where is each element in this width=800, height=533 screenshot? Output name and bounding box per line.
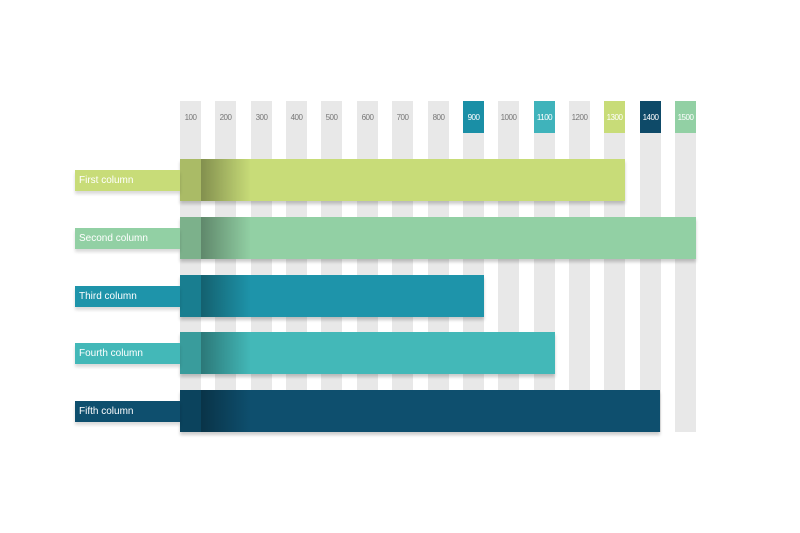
bar: fifth column xyxy=(180,390,660,432)
axis labels xyxy=(185,101,696,133)
axis labels: 500 xyxy=(326,113,337,122)
axis labels: 1100 xyxy=(537,113,552,122)
axis labels: 400 xyxy=(291,113,302,122)
label: second column xyxy=(75,228,180,249)
label: third column: Third column xyxy=(79,291,137,302)
label: first column xyxy=(75,170,180,191)
axis labels: 200 xyxy=(220,113,231,122)
axis labels: 1500 xyxy=(678,113,693,122)
bar: second column xyxy=(180,217,696,259)
axis labels: 1300 xyxy=(607,113,622,122)
grid columns xyxy=(180,101,696,432)
bar: fourth column xyxy=(180,332,555,374)
label: fifth column: Fifth column xyxy=(79,406,133,417)
label: second column: Second column xyxy=(79,233,148,244)
axis labels: 100 xyxy=(185,113,196,122)
axis labels: 1200 xyxy=(572,113,587,122)
bar: first column xyxy=(180,159,625,201)
axis labels: 600 xyxy=(362,113,373,122)
axis labels: 1400 xyxy=(643,113,658,122)
bar: third column xyxy=(180,275,484,317)
axis labels: 1000 xyxy=(501,113,516,122)
axis labels: 900 xyxy=(468,113,479,122)
axis labels: 800 xyxy=(433,113,444,122)
axis labels: 300 xyxy=(256,113,267,122)
label: fourth column: Fourth column xyxy=(79,348,143,359)
axis labels: 700 xyxy=(397,113,408,122)
label: third column xyxy=(75,286,180,307)
label: fifth column xyxy=(75,401,180,422)
label: first column: First column xyxy=(79,175,133,186)
label: fourth column xyxy=(75,343,180,364)
